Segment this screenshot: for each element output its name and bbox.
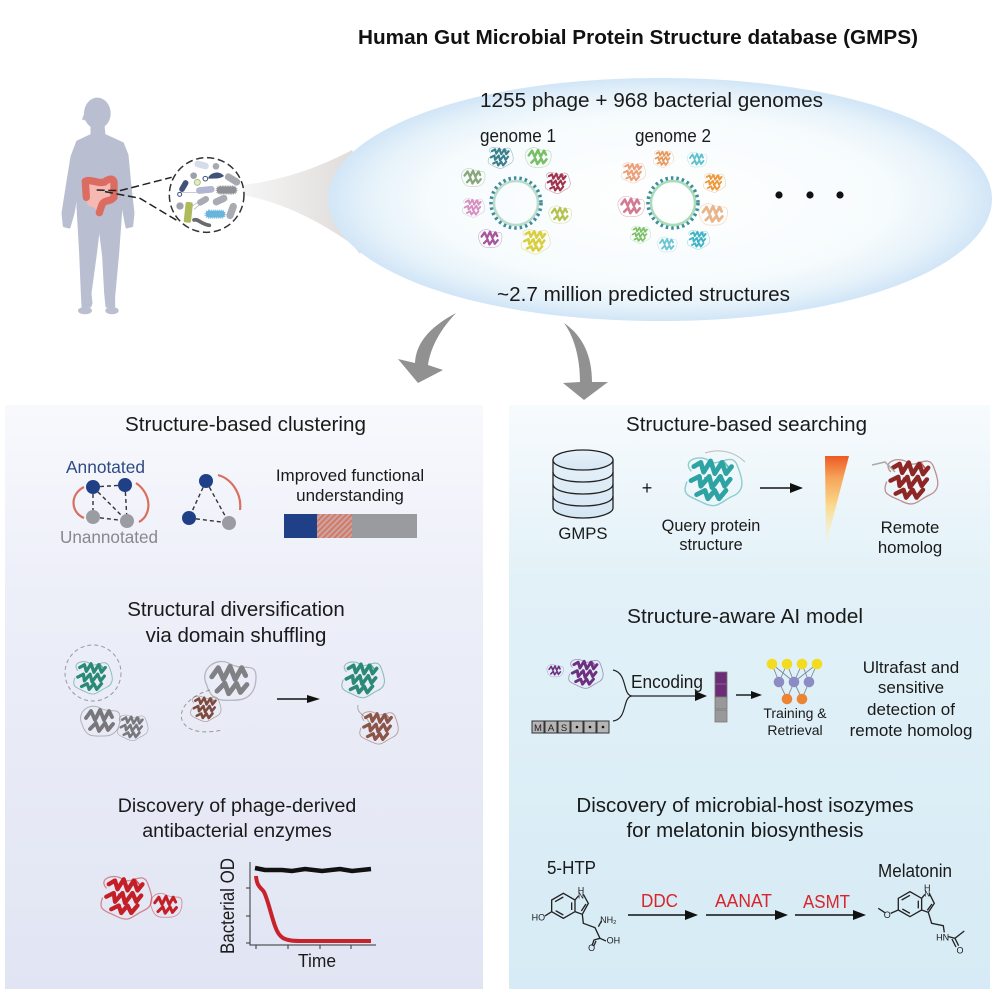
diagram: neural network [763,659,827,738]
icon: 5-HTP molecule: OH [607,936,620,946]
icon: ellipsis dots [775,191,844,199]
icon: 5-HTP molecule: HO [532,912,545,922]
diagram: genome 1 ring with proteins [461,147,572,254]
icon: plus: + [642,478,652,498]
icon: colon [85,179,116,213]
heading: melatonin isozymes: Discovery of microbial-host isozymes [576,794,914,817]
label: training and retrieval: Training & [763,705,827,721]
icon: melatonin molecule: O [884,910,891,920]
label: training and retrieval: Retrieval [767,722,823,738]
heading: structure-aware AI model: Structure-aware AI model [627,605,863,628]
icon: 5-HTP molecule: O [588,943,595,953]
icon: melatonin molecule [878,883,964,956]
icon: magnified gut microbes [97,158,244,232]
icon: ranking triangle [825,456,849,545]
arrow: left curved grey [398,313,456,383]
label: query protein structure: structure [679,536,743,554]
chart: bacterial OD over time [217,858,376,971]
label: x axis: Time [298,950,336,971]
panel: clustering and discovery background [5,405,483,989]
diagram: encoding pipeline [532,659,762,734]
text: genome 1 label: genome 1 [480,126,556,146]
text: ultrafast detection: sensitive [878,678,944,697]
icon: melatonin molecule: O [956,946,963,956]
text: predicted structures: ~2.7 million predicted structures [497,284,790,306]
panel: database ellipse [328,78,992,321]
diagram: domain shuffling [65,645,398,744]
heading: structure-based clustering: Structure-based clustering [125,413,366,436]
diagram: triangle network [182,474,240,530]
icon: 5-HTP molecule: N [578,891,584,900]
label: ASMT: ASMT [803,892,850,912]
label: annotated: Annotated [66,457,145,477]
text: genome 2 label: genome 2 [635,126,711,146]
label: Melatonin: Melatonin [878,860,952,881]
label: 5-HTP: 5-HTP [547,857,596,878]
diagram: genome 2 ring with proteins [618,150,727,252]
icon: red enzyme protein [101,876,182,919]
text: ultrafast detection: remote homolog [850,721,972,740]
heading: structure-based searching: Structure-based searching [626,413,867,436]
icon: query protein [685,451,745,506]
label: unannotated: Unannotated [60,527,158,547]
text: improved functional understanding: understanding [296,486,404,505]
heading: phage-derived enzymes: antibacterial enzymes [142,820,332,842]
title: Human Gut Microbial Protein Structure database (GMPS) [358,27,918,49]
arrow: right curved grey [563,323,608,400]
label: AANAT: AANAT [715,891,772,911]
label: GMPS: GMPS [558,524,608,543]
icon: human body with gut [63,98,133,314]
label: remote homolog: Remote [881,518,939,537]
heading: phage-derived enzymes: Discovery of phage-derived [118,795,356,817]
panel: searching and AI background [509,405,990,989]
label: encoding: Encoding [631,672,703,692]
text: ultrafast detection: Ultrafast and [863,658,959,677]
icon: remote homolog protein [872,460,938,504]
diagram: encoding pipeline: A [548,723,555,734]
diagram: annotation network [60,457,158,547]
icon: melatonin molecule: N [924,889,930,898]
icon: 5-HTP molecule [532,885,620,953]
heading: structural diversification: Structural diversification [127,598,345,621]
text: ultrafast detection: detection of [867,700,955,719]
icon: 5-HTP molecule: H [578,885,584,895]
label: DDC: DDC [641,891,678,911]
label: query protein structure: Query protein [662,517,760,535]
icon: database [553,450,613,518]
arrow: search [760,483,803,493]
text: improved functional understanding: Improved functional [276,466,424,485]
text: genome counts: 1255 phage + 968 bacterial genomes [480,90,823,112]
heading: melatonin isozymes: for melatonin biosynthesis [626,819,864,842]
diagram: encoding pipeline: S [561,723,567,734]
icon: 5-HTP molecule: NH₂ [600,915,617,925]
icon: melatonin molecule: H [924,883,931,893]
shape: zoom cone [243,150,378,254]
arrows and enzymes [628,891,866,920]
chart: functional bar [284,514,417,538]
heading: structural diversification: via domain shuffling [146,624,326,647]
label: y axis: Bacterial OD [217,858,239,954]
diagram: encoding pipeline: M [534,723,542,734]
label: remote homolog: homolog [878,538,942,557]
icon: melatonin molecule: HN [936,932,949,942]
